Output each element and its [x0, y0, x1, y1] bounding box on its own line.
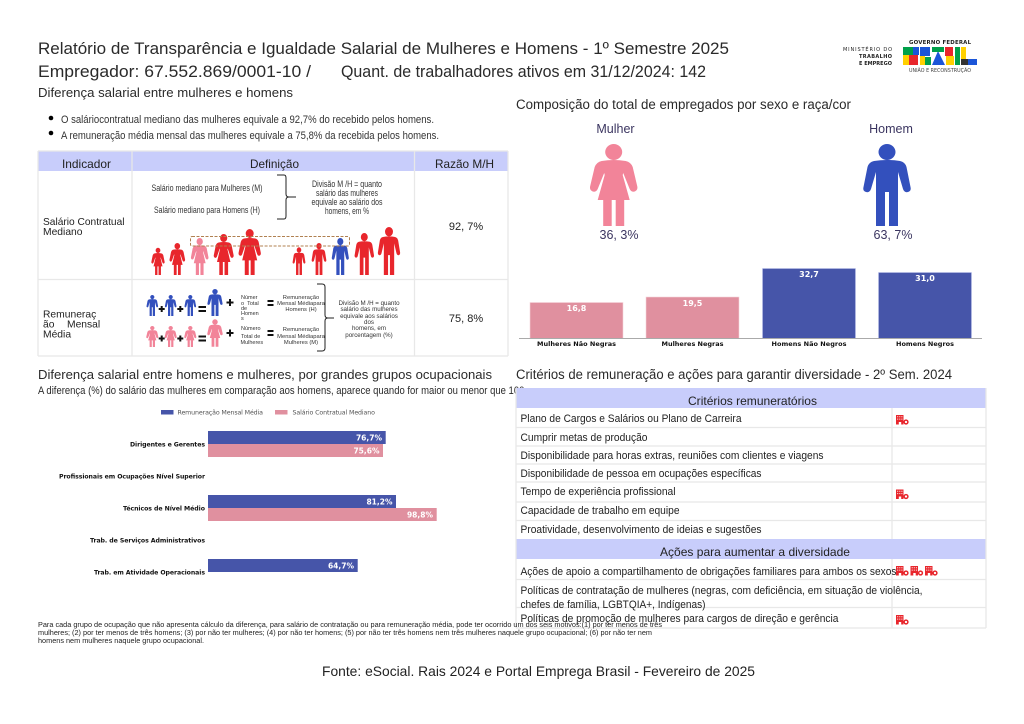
definition: remuneração média: Mensal Médiapara	[277, 301, 326, 307]
criteria table: Disponibilidade para horas extras, reuniões com clientes e viagens	[520, 450, 824, 462]
criteria table: Cumprir metas de produção	[520, 432, 648, 444]
horizontal bar chart: grupos ocupacionais: Profissionais em Ocupações Nível Superior	[59, 472, 206, 480]
definition: remuneração média: homens, em	[352, 325, 386, 332]
horizontal bar chart: grupos ocupacionais: 64,7%	[328, 562, 354, 570]
definition: salário mediano: equivale ao salário dos	[312, 197, 383, 208]
definition: remuneração média: o Total	[241, 301, 259, 307]
definition: remuneração média: de	[241, 306, 247, 312]
footnote: mulheres; (2) por ter menos de três homens; (3) por não ter mulheres; (4) por não ter homens; (5) por não ter três homens nem três mulheres naquele grupo ocupacional; (6) por não ter nem	[38, 630, 652, 637]
definition: remuneração média: Mulheres	[240, 340, 263, 346]
bar chart: composição por sexo e raça	[519, 268, 982, 348]
horizontal bar chart: grupos ocupacionais: 81,2%	[366, 498, 393, 506]
indicator table: Definição	[250, 157, 299, 171]
indicator table: Indicador	[62, 157, 111, 171]
bar chart: composição por sexo e raça: 31,0	[915, 274, 935, 283]
title: Relatório de Transparência e Igualdade Salarial de Mulheres e Homens - 1º Semestre 2025	[38, 39, 729, 58]
bar chart: composição por sexo e raça: Homens Negros	[896, 340, 954, 348]
horizontal bar chart: grupos ocupacionais: Trab. de Serviços Administrativos	[90, 538, 205, 544]
definition: remuneração média: Divisão M /H = quanto	[338, 300, 400, 307]
definition: remuneração média: Remuneração	[283, 327, 319, 333]
criteria table	[516, 388, 986, 628]
horizontal bar chart: grupos ocupacionais: Trab. em Atividade Operacionais	[94, 570, 205, 576]
definition: remuneração média	[146, 284, 400, 351]
indicator table: 75, 8%	[449, 313, 483, 325]
criteria table: Políticas de contratação de mulheres (negras, com deficiência, em situação de violência,	[520, 585, 922, 597]
definition: remuneração média: dos	[364, 319, 374, 326]
logo: ministério and governo federal	[843, 40, 977, 74]
bullet list: O salário​contratual mediano das mulheres equivale a 92,7% do recebido pelos homens.	[61, 114, 434, 126]
title: Empregador: 67.552.869/0001-10 /	[38, 62, 311, 81]
definition: remuneração média: s	[241, 316, 244, 322]
definition: remuneração média: Número	[241, 326, 261, 332]
indicator table: 92, 7%	[449, 221, 483, 233]
heading: composição: Composição do total de empregados por sexo e raça/cor	[516, 97, 851, 112]
legend: Salário Contratual Mediano	[292, 408, 375, 416]
definition: salário mediano: Divisão M /H = quanto	[312, 179, 382, 190]
indicator table: Mediano	[43, 227, 83, 238]
horizontal bar chart: grupos ocupacionais: 76,7%	[356, 434, 382, 442]
definition: remuneração média: porcentagem (%)	[345, 332, 393, 339]
criteria table: chefes de família, LGBTQIA+, Indígenas)	[520, 599, 706, 611]
logo: ministério and governo federal: E EMPREGO	[859, 61, 892, 67]
heading: diferença salarial: Diferença salarial entre mulheres e homens	[38, 85, 293, 100]
heading: grupos ocupacionais	[38, 367, 527, 397]
definition: remuneração média: Remuneração	[283, 295, 319, 301]
definition: remuneração média: Númer	[241, 295, 258, 301]
logo: ministério and governo federal: MINISTÉRIO DO	[843, 45, 892, 53]
criteria table: Disponibilidade de pessoa em ocupações específicas	[520, 468, 762, 480]
icon: homem 63,7%	[863, 122, 913, 242]
logo: ministério and governo federal: TRABALHO	[859, 54, 892, 60]
horizontal bar chart: grupos ocupacionais: Técnicos de Nível Médio	[123, 504, 205, 512]
legend: Remuneração Mensal Média	[178, 408, 263, 416]
definition: salário mediano: homens, em %	[325, 206, 369, 217]
bar chart: composição por sexo e raça: 32,7	[799, 270, 819, 279]
definition: remuneração média: Homen	[241, 311, 259, 317]
horizontal bar chart: grupos ocupacionais: Dirigentes e Gerentes	[130, 442, 205, 448]
bullet list: A remuneração média mensal das mulheres equivale a 75,8% da recebida pelos homens.	[61, 130, 439, 142]
source: Fonte: eSocial. Rais 2024 e Portal Emprega Brasil - Fevereiro de 2025	[322, 663, 755, 679]
icon: mulher 36,3%: Mulher	[596, 122, 635, 136]
logo: ministério and governo federal: GOVERNO FEDERAL	[909, 40, 972, 46]
criteria table: Ações de apoio a compartilhamento de obrigações familiares para ambos os sexos	[520, 566, 897, 578]
title: Quant. de trabalhadores ativos em 31/12/2024: 142	[341, 62, 706, 81]
icon: mulher 36,3%	[590, 122, 638, 242]
definition: remuneração média: salário das mulheres	[340, 306, 398, 313]
legend	[161, 408, 375, 416]
footnote: homens nem mulheres naquele grupo ocupacional.	[38, 638, 204, 645]
bar chart: composição por sexo e raça: 19,5	[683, 299, 703, 308]
criteria table: Plano de Cargos e Salários ou Plano de Carreira	[520, 413, 742, 425]
bar chart: composição por sexo e raça: Homens Não Negros	[772, 340, 847, 348]
definition: remuneração média: Mensal Médiapara	[277, 334, 326, 340]
definition: remuneração média: Homens (H)	[285, 307, 317, 313]
indicator table: Mensal	[67, 320, 100, 330]
bar chart: composição por sexo e raça: 16,8	[567, 304, 587, 313]
criteria table: Proatividade, desenvolvimento de ideias e sugestões	[520, 524, 762, 536]
footnote	[38, 622, 663, 645]
criteria table: Capacidade de trabalho em equipe	[520, 505, 680, 517]
icon: homem 63,7%: 63, 7%	[874, 228, 912, 242]
indicator table: ão	[43, 320, 55, 330]
definition: remuneração média: equivale aos salários	[340, 313, 398, 320]
criteria table: Tempo de experiência profissional	[520, 486, 676, 498]
criteria table: Critérios remuneratórios	[688, 394, 817, 408]
criteria table: Ações para aumentar a diversidade	[660, 545, 850, 559]
definition: salário mediano: salário das mulheres	[316, 188, 378, 199]
bullet list	[49, 114, 439, 142]
bar chart: composição por sexo e raça: Mulheres Não Negras	[537, 340, 616, 348]
icon: mulher 36,3%: 36, 3%	[600, 228, 638, 242]
criteria table: Políticas de promoção de mulheres para cargos de direção e gerência	[520, 613, 838, 625]
indicator table: Salário Contratual	[43, 217, 124, 228]
definition: remuneração média: Total de	[241, 334, 260, 340]
horizontal bar chart: grupos ocupacionais: 98,8%	[407, 510, 433, 520]
definition: salário mediano: Salário mediano para Mulheres (M)	[152, 183, 262, 194]
indicator table: Razão M/H	[435, 157, 494, 171]
heading: grupos ocupacionais: Diferença salarial entre homens e mulheres, por grandes grupos ocupacionais	[38, 367, 492, 382]
heading: grupos ocupacionais: A diferença (%) do salário das mulheres em comparação aos homens, aparece quando for maior ou menor que 100:	[38, 385, 527, 397]
indicator table	[38, 151, 508, 356]
footnote: Para cada grupo de ocupação que não apresenta cálculo da diferença, para salário de contratação ou para remuneração média, pode ter ocorrido um dos seis motivos:(1) por ter menos de três	[38, 622, 663, 629]
horizontal bar chart: grupos ocupacionais: 75,6%	[353, 446, 380, 456]
definition: remuneração média: Mulheres (M)	[284, 340, 318, 346]
indicator table: Média	[43, 330, 71, 340]
definition: salário mediano	[151, 175, 400, 275]
icon: homem 63,7%: Homem	[869, 122, 913, 136]
bar chart: composição por sexo e raça: Mulheres Negras	[662, 340, 724, 348]
indicator table: Remuneraç	[43, 310, 96, 320]
title	[38, 39, 729, 81]
heading: critérios: Critérios de remuneração e ações para garantir diversidade - 2º Sem. 2024	[516, 367, 952, 382]
logo: ministério and governo federal: UNIÃO E RECONSTRUÇÃO	[909, 67, 971, 74]
horizontal bar chart: grupos ocupacionais	[59, 431, 437, 576]
definition: salário mediano: Salário mediano para Homens (H)	[154, 205, 260, 216]
